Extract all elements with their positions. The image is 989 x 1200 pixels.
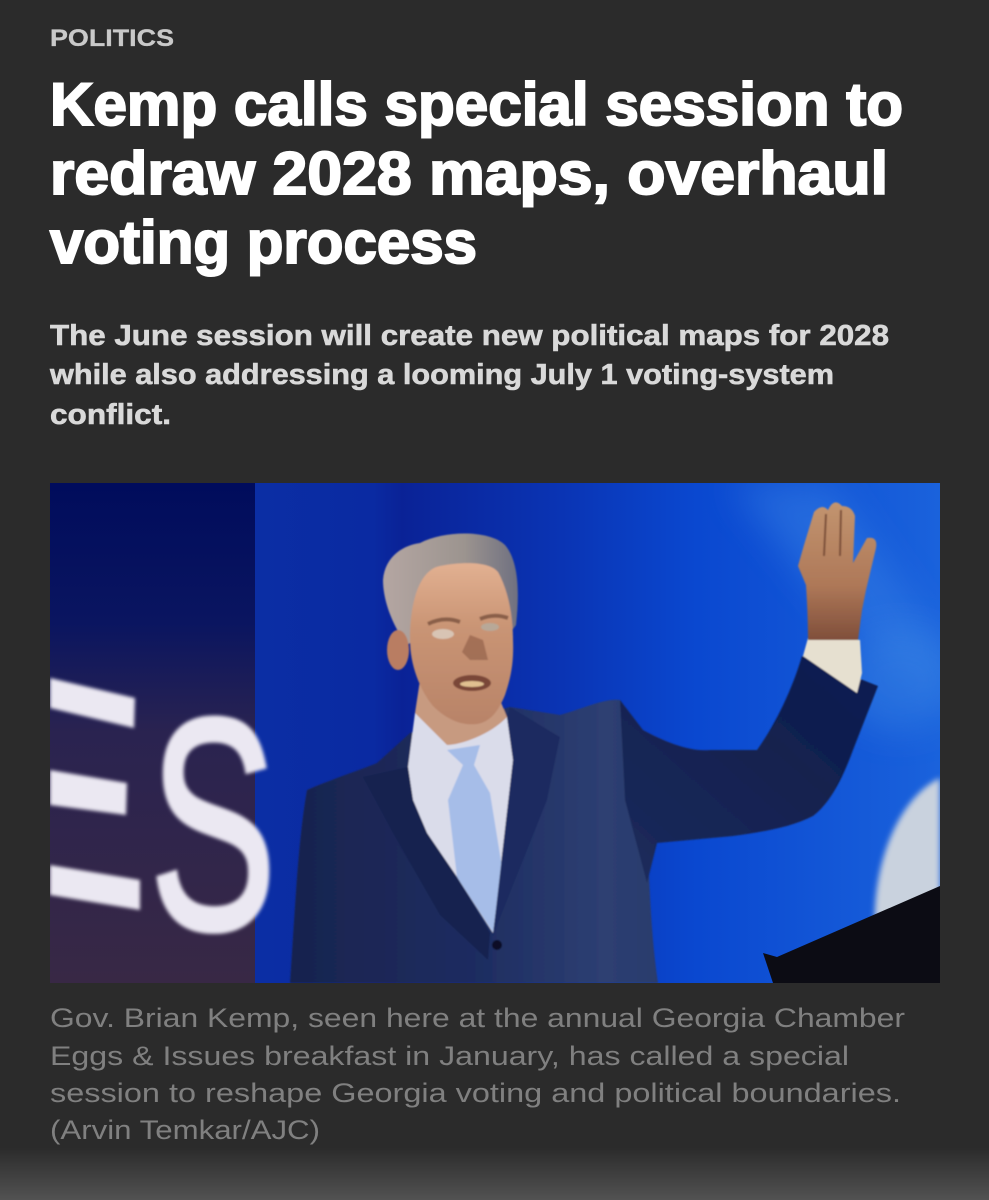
blurred stage sign letters	[50, 676, 272, 937]
podium	[763, 886, 940, 983]
photo caption: (Arvin Temkar/AJC)	[50, 1115, 320, 1145]
facial features	[428, 616, 508, 691]
title	[50, 71, 903, 276]
tie	[447, 745, 502, 932]
photo caption	[50, 1003, 905, 1145]
subtitle: The June session will create new political maps for 2028	[50, 320, 889, 352]
raised sleeve	[620, 656, 878, 883]
jacket button	[492, 940, 502, 950]
subtitle	[49, 320, 889, 431]
section label: POLITICS	[50, 25, 174, 52]
right lapel	[495, 716, 560, 924]
raised hand	[798, 502, 876, 640]
subtitle: conflict.	[50, 399, 171, 431]
face	[410, 563, 513, 724]
bottom fade	[0, 1148, 989, 1200]
photo caption: Eggs & Issues breakfast in January, has called a special	[50, 1041, 849, 1071]
shirt cuff	[803, 638, 862, 693]
photo caption: Gov. Brian Kemp, seen here at the annual Georgia Chamber	[50, 1003, 905, 1033]
photo caption: session to reshape Georgia voting and political boundaries.	[50, 1078, 901, 1108]
speaker figure	[290, 502, 878, 983]
subtitle: while also addressing a looming July 1 voting-system	[49, 359, 834, 391]
suit jacket	[290, 700, 658, 983]
left lapel	[384, 768, 490, 959]
title: voting process	[50, 209, 477, 276]
shirt	[408, 713, 513, 933]
title: redraw 2028 maps, overhaul	[50, 140, 888, 207]
title: Kemp calls special session to	[50, 71, 903, 138]
background person	[875, 778, 940, 930]
ear	[387, 630, 409, 670]
stage backdrop	[50, 483, 960, 983]
hair	[383, 533, 518, 645]
photo: Gov. Brian Kemp waving on stage	[50, 483, 960, 993]
neck	[415, 680, 507, 745]
blurred stage sign letters: S	[150, 658, 276, 993]
